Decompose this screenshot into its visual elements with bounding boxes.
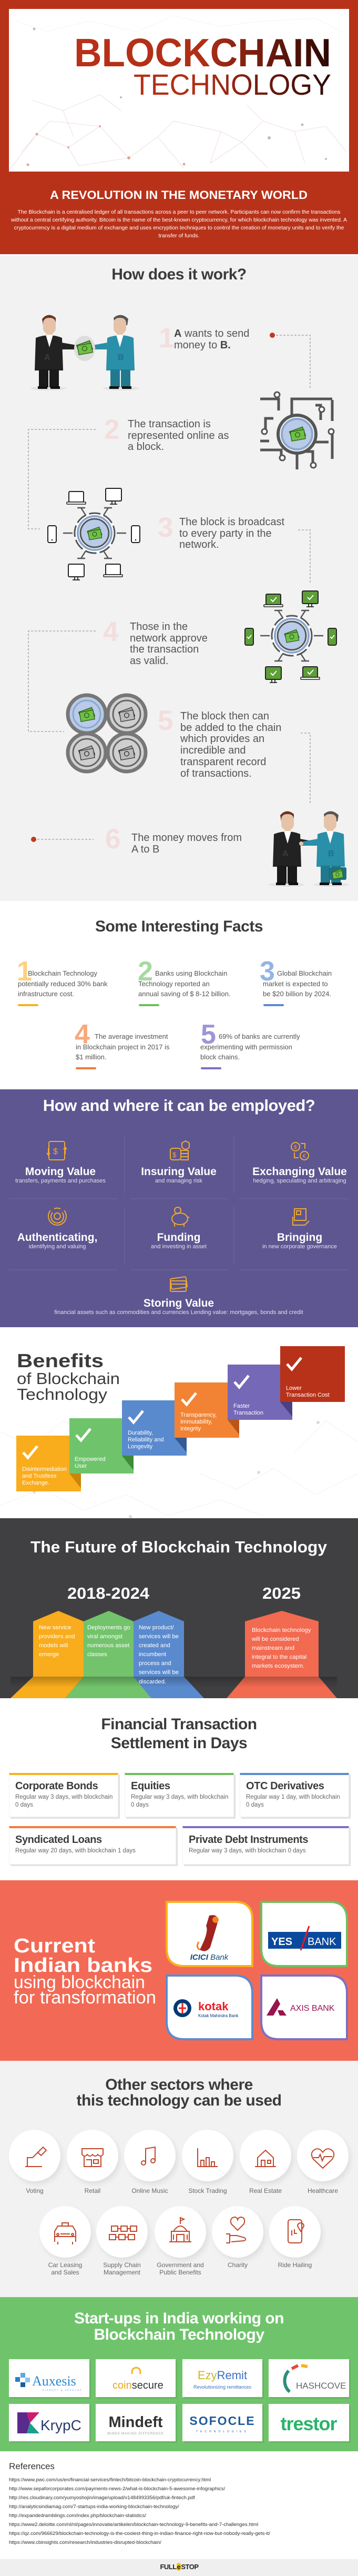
panel: future of blockchain: incumbent: [139, 1651, 167, 1658]
panel: other sectors: Public Benefits: [159, 2269, 201, 2276]
step 6 text: A to B: [131, 844, 159, 855]
card: equities: Regular way 3 days, with blockchain: [131, 1794, 228, 1800]
item: authenticating: [17, 1231, 97, 1250]
panel: other sectors: Car Leasing: [48, 2261, 82, 2269]
panel: future of blockchain: discarded.: [139, 1679, 166, 1685]
item: insuring value: [141, 1166, 217, 1184]
icon: exchanging value: [291, 1142, 309, 1160]
icon: bringing: [293, 1209, 309, 1225]
item: funding: [151, 1231, 207, 1250]
logo: sofocle: [182, 2404, 262, 2441]
fact 3: market is expected to: [263, 980, 328, 987]
heading: settlement: Financial Transaction: [101, 1716, 257, 1733]
intro paragraph: The Blockchain is a centralised ledger of all transactions across a peer to peer network. Participants can now confirm the transactions without a central certifying authority. Bitcoin is the name of the best-known cryptocurrency, for which blockchain technology was invented. A cryptocurrency is a digital medium of exchange and uses encryption techniques to control the creation of monetary units and to verify the transfer of funds.: [11, 209, 347, 239]
references: http://analyticsindiamag.com/7-startups-india-working-blockchain-technology/: [9, 2504, 179, 2510]
card: otc derivatives: [240, 1773, 349, 1817]
logo: yes bank: BANK: [308, 1936, 336, 1948]
fact 2: Banks using Blockchain: [155, 969, 227, 977]
panel: future of blockchain: markets ecosystem.: [252, 1663, 304, 1669]
heading: some interesting facts: Some Interesting Facts: [95, 918, 263, 935]
benefit steps: Immutability,: [180, 1419, 212, 1425]
logo: mindeft: MINDS MAKING DIFFERENCE: [107, 2432, 164, 2435]
step 6 text: The money moves from: [131, 832, 242, 844]
icon: network approval: [245, 591, 336, 683]
panel: future of blockchain: emerge: [39, 1651, 59, 1658]
references: [9, 2461, 270, 2545]
fact 4: $1 million.: [76, 1053, 107, 1061]
item: funding: Funding: [157, 1231, 200, 1244]
footer logo: [0, 2559, 358, 2576]
card: corporate bonds: [9, 1773, 118, 1817]
panel: future of blockchain: classes: [87, 1651, 107, 1658]
card: syndicated loans: [9, 1826, 176, 1865]
step 5 text: incredible and: [180, 745, 246, 756]
panel: other sectors: Online Music: [131, 2187, 168, 2194]
step 4 text: Those in the: [130, 621, 188, 633]
heading: other sectors: [77, 2076, 281, 2109]
references: https://www2.deloitte.com/nl/nl/pages/innovatie/artikelen/blockchain-technology-9-benefits-and-7-challenges.html: [9, 2522, 258, 2528]
step 5 text: [180, 710, 281, 779]
heading: how does it work: How does it work?: [111, 266, 247, 283]
fact 4: [75, 1019, 169, 1069]
panel: other sectors: Supply Chain: [103, 2261, 141, 2269]
panel: other sectors: Ride Hailing: [278, 2261, 312, 2269]
panel: benefits: [0, 1346, 358, 1518]
step 3 text: to every party in the: [179, 528, 272, 539]
fact 1: potentially reduced 30% bank: [18, 980, 108, 987]
benefit steps: Lower: [286, 1385, 302, 1391]
card: private debt: Regular way 3 days, with blockchain 0 days: [189, 1848, 305, 1854]
panel: future of blockchain: will be considered: [251, 1636, 299, 1642]
fact 3: 3: [260, 956, 275, 987]
period labels: 2018-2024: [67, 1584, 150, 1602]
panel: future of blockchain: mainstream and: [252, 1645, 294, 1651]
fact 2: 2: [138, 956, 153, 987]
benefit steps: Exchange.: [22, 1480, 49, 1486]
benefit steps: Transaction Cost: [286, 1392, 330, 1398]
fact 2: annual saving of $ 8-12 billion.: [138, 990, 231, 998]
item: storing value: financial assets such as commodities and currencies Lending value: mortgages, bonds and credit: [54, 1309, 303, 1316]
logo: kotak: [167, 1976, 252, 2039]
references: https://qz.com/966629/blockchain-technology-is-the-coolest-thing-in-indian-finance-right-now-but-nobody-really-gets-it/: [9, 2531, 270, 2537]
dashed flow connector: [28, 335, 310, 839]
benefit steps: Disintermediation: [22, 1466, 67, 1472]
item: bringing: Bringing: [277, 1231, 322, 1244]
heading: settlement: Settlement in Days: [111, 1735, 247, 1752]
step 5 text: The block then can: [180, 710, 269, 722]
panel: future of blockchain: models will: [39, 1642, 68, 1649]
logo: axis bank: [261, 1976, 347, 2039]
fact 3: be $20 billion by 2024.: [263, 990, 331, 998]
card: private debt: Private Debt Instruments: [189, 1834, 308, 1846]
step numbers: 4: [103, 616, 119, 647]
references: References: [9, 2461, 55, 2471]
panel: future of blockchain: services will be: [139, 1633, 179, 1640]
step 4 text: network approve: [130, 633, 208, 644]
logo: auxesis: [9, 2359, 89, 2397]
step numbers: 5: [158, 705, 173, 736]
heading: benefits: Technology: [17, 1385, 108, 1404]
step 3 text: The block is broadcast: [179, 516, 284, 528]
panel: future of blockchain: [0, 1518, 358, 1698]
panel: future of blockchain: numerous asset: [87, 1642, 130, 1649]
fact 3: Global Blockchain: [277, 969, 332, 977]
logo: mindeft: [96, 2404, 176, 2441]
logo: icici: [167, 1902, 252, 1966]
references: http://res.cloudinary.com/yumyoshojin/image/upload/v1484993356/pdf/uk-fintech.pdf: [9, 2495, 195, 2501]
logo: icici: ICICI Bank: [190, 1953, 229, 1962]
step 2 text: The transaction is: [128, 418, 211, 430]
logo: kotak: Kotak Mahindra Bank: [198, 2013, 239, 2018]
card: equities: [125, 1773, 234, 1817]
heading: start-ups: [74, 2310, 284, 2343]
references: https://www.cbinsights.com/research/industries-disrupted-blockchain/: [9, 2540, 161, 2545]
benefit steps: Empowered: [75, 1456, 106, 1462]
references: http://www.sepaforcorporates.com/payments-news-2/what-is-blockchain-5-awesome-infographics/: [9, 2486, 225, 2492]
step 3 text: [179, 516, 284, 550]
logo: ezyremit: [182, 2359, 262, 2397]
item: authenticating: Authenticating,: [17, 1231, 97, 1244]
title: TECHNOLOGY: [134, 68, 331, 101]
heading: benefits: Benefits: [17, 1350, 104, 1371]
item: moving value: transfers, payments and purchases: [15, 1178, 106, 1184]
panel: future of blockchain: integral to the capital: [252, 1654, 306, 1660]
benefit steps: [16, 1346, 345, 1491]
logo: sofocle: SOFOCLE: [189, 2414, 255, 2428]
logo: hashcove: [269, 2359, 349, 2397]
benefit steps: Reliability and: [128, 1437, 163, 1443]
logo: krypc: [9, 2404, 89, 2441]
step 5 text: be added to the chain: [180, 722, 281, 734]
panel: other sectors: Real Estate: [249, 2187, 282, 2194]
heading: indian banks: [14, 1935, 156, 2008]
step 5 text: which provides an: [180, 733, 264, 745]
heading: future: The Future of Blockchain Technology: [30, 1538, 328, 1556]
panel: how does it work: [0, 256, 358, 901]
item: exchanging value: [252, 1166, 347, 1184]
item: storing value: [54, 1297, 303, 1316]
sector icons: [25, 2146, 334, 2244]
item: authenticating: identifying and valuing: [29, 1244, 86, 1250]
step 1 text: A wants to send: [174, 328, 249, 339]
panel: other sectors: Retail: [85, 2187, 100, 2194]
fact 5: block chains.: [200, 1053, 240, 1061]
heading: other sectors: this technology can be used: [77, 2092, 281, 2109]
item: bringing: in new corporate governance: [262, 1244, 337, 1250]
heading: indian banks: Indian banks: [14, 1954, 152, 1977]
subtitle: A REVOLUTION IN THE MONETARY WORLD: [50, 188, 308, 202]
heading: start-ups: Start-ups in India working on: [74, 2310, 284, 2327]
icon: chain of blocks: [68, 695, 146, 771]
step numbers: 1: [159, 323, 174, 354]
card: private debt: [182, 1826, 349, 1865]
logo: trestor: [269, 2404, 349, 2441]
step 5 text: transparent record: [180, 756, 266, 768]
icon: network broadcast: [48, 488, 140, 580]
fact 5: 5: [201, 1019, 216, 1050]
logo: axis bank: AXIS BANK: [290, 2004, 335, 2013]
fact 1: infrastructure cost.: [18, 990, 74, 998]
card: syndicated loans: Regular way 20 days, with blockchain 1 days: [15, 1848, 136, 1854]
fact 4: 4: [75, 1019, 90, 1050]
icon: two people exchanging money: [30, 315, 139, 390]
fact 3: [260, 956, 332, 1006]
panel: other sectors: Stock Trading: [188, 2187, 227, 2194]
item: moving value: Moving Value: [25, 1166, 96, 1178]
icon: authenticating: [48, 1208, 66, 1225]
step 4 text: [130, 621, 208, 667]
heading: indian banks: for transformation: [14, 1988, 156, 2008]
step 2 text: [128, 418, 229, 453]
card: otc derivatives: 0 days: [246, 1802, 264, 1808]
item: bringing: [262, 1231, 337, 1250]
card: otc derivatives: OTC Derivatives: [246, 1780, 324, 1792]
item: exchanging value: Exchanging Value: [252, 1166, 347, 1178]
step 2 text: a block.: [128, 441, 164, 453]
logo: coinsecure: [96, 2359, 176, 2397]
step 4 text: as valid.: [130, 655, 168, 667]
step numbers: 3: [158, 512, 173, 543]
benefit steps: Integrity: [180, 1426, 201, 1432]
fact 1: [17, 956, 108, 1006]
step 4 text: the transaction: [130, 644, 199, 655]
step numbers: 2: [104, 414, 119, 445]
logo: hashcove: HASHCOVE: [296, 2381, 346, 2391]
fact 1: 1: [17, 956, 32, 987]
benefit steps: and Trustless: [22, 1473, 57, 1479]
fact 5: experimenting with permission: [200, 1043, 292, 1050]
heading: start-ups: Blockchain Technology: [94, 2326, 264, 2343]
title: BLOCKCHAIN: [74, 31, 331, 75]
item: funding: and investing in asset: [151, 1244, 207, 1250]
header panel: [0, 0, 358, 254]
panel: future of blockchain: Deployments go: [87, 1625, 130, 1631]
panel: future of blockchain: services will be: [139, 1669, 179, 1676]
step 3 text: network.: [179, 539, 219, 550]
arrows: timeline stages: [11, 1611, 337, 1698]
item: exchanging value: hedging, speculating and arbitraging: [253, 1178, 346, 1184]
step 1 text: [174, 328, 249, 351]
benefit steps: Faster: [233, 1403, 250, 1409]
fact 5: 69% of banks are currently: [219, 1033, 300, 1040]
references: https://www.pwc.com/us/en/financial-services/fintech/bitcoin-blockchain-cryptocurrency.html: [9, 2477, 211, 2483]
fact 5: [200, 1019, 300, 1069]
step numbers: 6: [105, 824, 120, 855]
benefit steps: Transparency,: [180, 1412, 217, 1418]
step 2 text: represented online as: [128, 430, 229, 442]
logo: yes bank: YES: [271, 1936, 292, 1948]
item: moving value: [15, 1166, 106, 1184]
panel: future of blockchain: New product/: [139, 1625, 174, 1631]
card: corporate bonds: Regular way 3 days, with blockchain: [15, 1794, 112, 1800]
icon: moving value: [47, 1141, 67, 1160]
panel: other sectors: Charity: [228, 2261, 248, 2269]
panel: indian banks: [0, 1880, 358, 2061]
icon: moving value: $: [53, 1147, 58, 1156]
icon: insuring value: [170, 1141, 189, 1160]
title: [74, 31, 331, 101]
icon: exchanging value: $: [294, 1145, 297, 1150]
benefit steps: User: [75, 1463, 87, 1469]
logo: mindeft: Mindeft: [108, 2414, 163, 2431]
heading: settlement: [101, 1716, 257, 1752]
footer logo: FULLeSTOP: [160, 2563, 199, 2571]
panel: future of blockchain: Blockchain technology: [252, 1627, 311, 1633]
fact 1: Blockchain Technology: [28, 969, 97, 977]
panel: other sectors: and Sales: [51, 2269, 79, 2276]
logo: coinsecure: coinsecure: [112, 2380, 163, 2391]
panel: other sectors: [0, 2061, 358, 2297]
panel: start-ups: [0, 2297, 358, 2451]
icon: insuring value: $: [172, 1151, 177, 1159]
card: syndicated loans: Syndicated Loans: [15, 1834, 102, 1846]
fact 4: The average investment: [95, 1033, 168, 1040]
fact 4: in Blockchain project in 2017 is: [76, 1043, 169, 1050]
logo: yes bank: [261, 1902, 347, 1966]
references: http://expandedramblings.com/index.php/blockchain-statistics/: [9, 2513, 146, 2519]
item: storing value: Storing Value: [144, 1297, 214, 1309]
item: insuring value: Insuring Value: [141, 1166, 217, 1178]
card: corporate bonds: 0 days: [15, 1802, 33, 1808]
logo: auxesis: DISRUPT N DEVELOP: [43, 2389, 82, 2391]
step numbers: [103, 323, 174, 855]
panel: future of blockchain: New service: [39, 1625, 71, 1631]
card: equities: Equities: [131, 1780, 170, 1792]
icon: exchanging value: €: [303, 1154, 306, 1159]
card: corporate bonds: Corporate Bonds: [15, 1780, 98, 1792]
logo: auxesis: Auxesis: [32, 2373, 76, 2389]
panel: future of blockchain: providers and: [39, 1633, 75, 1640]
logo: kotak: kotak: [198, 2000, 229, 2013]
fact 2: Technology reported an: [138, 980, 210, 987]
panel: other sectors: Government and: [157, 2261, 204, 2269]
benefit steps: Transaction: [233, 1410, 263, 1416]
period labels: [67, 1584, 301, 1602]
heading: other sectors: Other sectors where: [105, 2076, 253, 2093]
sector labels: Voting: [26, 2187, 44, 2194]
panel: how and where it can be employed: [0, 1089, 358, 1327]
icon: circuit block: [260, 392, 334, 469]
item: insuring value: and managing risk: [155, 1178, 202, 1184]
panel: other sectors: Healthcare: [308, 2187, 338, 2194]
logo: sofocle: TECHNOLOGIES: [196, 2430, 249, 2433]
benefit steps: Longevity: [128, 1444, 153, 1450]
period labels: 2025: [262, 1584, 301, 1602]
logo: trestor: trestor: [280, 2413, 337, 2434]
step 5 text: of transactions.: [180, 768, 252, 779]
logo: ezyremit: EzyRemit: [198, 2369, 247, 2382]
card: equities: 0 days: [131, 1802, 149, 1808]
fact 2: [138, 956, 231, 1006]
heading: indian banks: using blockchain: [14, 1972, 145, 1992]
panel: future of blockchain: created and: [139, 1642, 170, 1649]
heading: benefits: of Blockchain: [17, 1369, 120, 1388]
step 1 text: money to B.: [174, 339, 231, 351]
benefit steps: Durability,: [128, 1430, 153, 1436]
heading: employed: How and where it can be employed?: [43, 1096, 315, 1115]
card: otc derivatives: Regular way 1 day, with blockchain: [246, 1794, 340, 1800]
heading: indian banks: Current: [14, 1935, 95, 1957]
panel: future of blockchain: viral amongst: [87, 1633, 123, 1640]
step 6 text: [131, 832, 242, 855]
panel: future of blockchain: process and: [139, 1660, 171, 1667]
heading: benefits: [17, 1350, 120, 1404]
icon: funding: [172, 1207, 189, 1227]
logo: krypc: KrypC: [40, 2417, 81, 2433]
logo: ezyremit: Revolutionizing remittances: [193, 2384, 252, 2390]
icon: handshake: [269, 811, 349, 887]
panel: other sectors: Management: [104, 2269, 140, 2276]
icon: storing value: [170, 1277, 187, 1291]
